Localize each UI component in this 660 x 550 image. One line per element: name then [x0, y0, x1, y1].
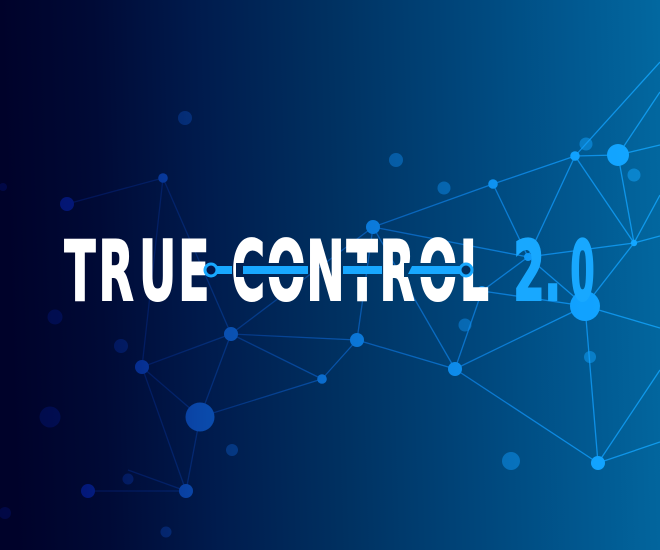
network: connecting lines — [67, 62, 660, 491]
circuit line through title — [205, 264, 472, 276]
title: version number 2.0: 0 — [570, 224, 595, 321]
network: bright nodes — [60, 144, 637, 498]
title: version number 2.0: 2. — [513, 223, 561, 320]
network: faint floating dots — [0, 111, 640, 538]
title: version number 2.0 — [513, 223, 595, 321]
circuit node: left — [205, 264, 217, 276]
title: TRUE CONTROL: TRUECONTROL — [64, 223, 489, 320]
circuit node: right — [460, 264, 472, 276]
